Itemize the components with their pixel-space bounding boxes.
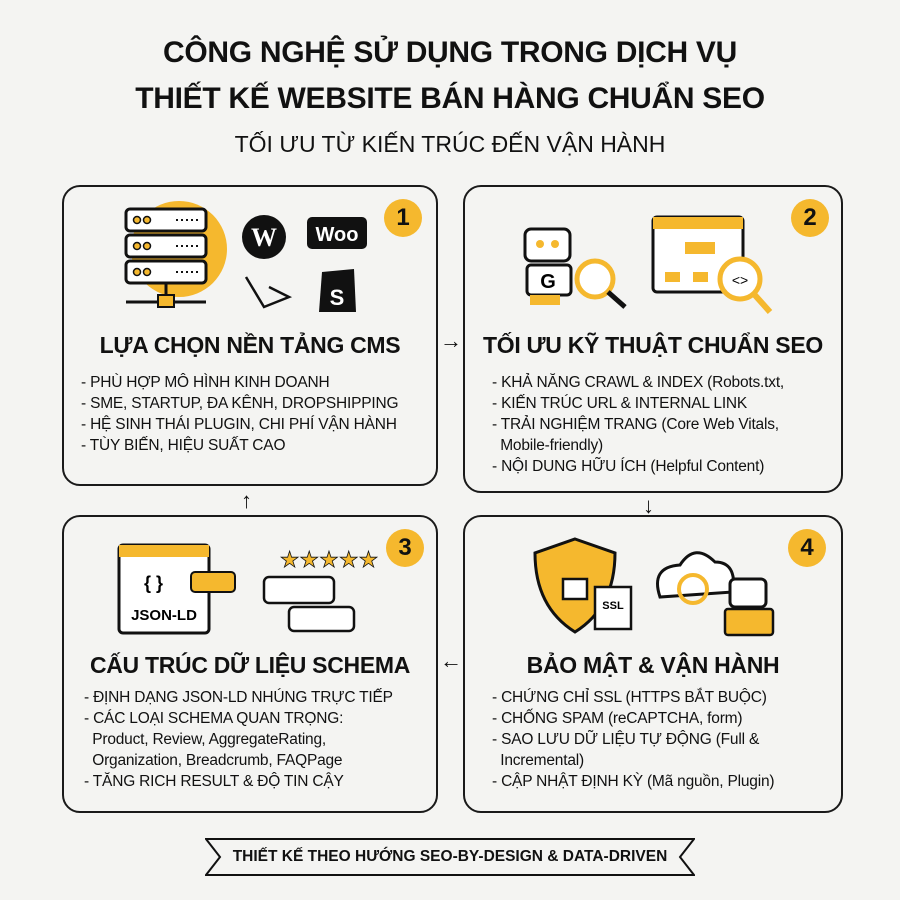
- panel 1: CMS: [62, 185, 438, 486]
- list: - NỘI DUNG HỮU ÍCH (Helpful Content): [492, 458, 764, 475]
- list: - TRẢI NGHIỆM TRANG (Core Web Vitals,: [492, 416, 779, 433]
- list: - KHẢ NĂNG CRAWL & INDEX (Robots.txt,: [492, 374, 784, 391]
- list: [84, 688, 393, 790]
- icons: server and CMS logos: [124, 201, 367, 312]
- list: [492, 373, 784, 475]
- arrow 1 to 2: →: [440, 328, 462, 353]
- list: [81, 373, 398, 454]
- list: - TÙY BIẾN, HIỆU SUẤT CAO: [81, 437, 285, 454]
- arrow 3 to 1: ↑: [241, 488, 252, 513]
- icons: robot and sitemap: [524, 216, 772, 314]
- list: - CHỐNG SPAM (reCAPTCHA, form): [492, 710, 742, 727]
- icons: server and CMS logos: S: [330, 285, 344, 310]
- heading: BẢO MẬT & VẬN HÀNH: [527, 652, 779, 678]
- heading: LỰA CHỌN NỀN TẢNG CMS: [100, 332, 400, 358]
- badge 3: [386, 529, 424, 567]
- footer banner: [205, 838, 695, 876]
- list: Product, Review, AggregateRating,: [92, 731, 326, 748]
- list: Mobile-friendly): [500, 437, 603, 454]
- arrow 4 to 3: ←: [440, 648, 462, 673]
- badge 1: 1: [396, 204, 410, 231]
- heading: CẤU TRÚC DỮ LIỆU SCHEMA: [90, 652, 410, 678]
- title: CÔNG NGHỆ SỬ DỤNG TRONG DỊCH VỤ: [163, 36, 737, 69]
- badge 2: [791, 199, 829, 237]
- list: - ĐỊNH DẠNG JSON-LD NHÚNG TRỰC TIẾP: [84, 689, 393, 706]
- panel 3: schema: [62, 515, 438, 813]
- list: - KIẾN TRÚC URL & INTERNAL LINK: [492, 395, 747, 412]
- panel 4: security: [463, 515, 843, 813]
- arrow 2 to 4: ↓: [643, 493, 654, 518]
- icons: shield, cloud, robot: [534, 537, 774, 636]
- list: - HỆ SINH THÁI PLUGIN, CHI PHÍ VẬN HÀNH: [81, 416, 397, 433]
- footer banner: THIẾT KẾ THEO HƯỚNG SEO-BY-DESIGN & DATA-DRIVEN: [233, 848, 667, 865]
- icons: server and CMS logos: W: [251, 223, 277, 252]
- title: [135, 35, 765, 115]
- badge 1: [384, 199, 422, 237]
- icons: server and CMS logos: Woo: [316, 224, 358, 246]
- icons: robot and sitemap: <>: [732, 272, 748, 288]
- list: [492, 688, 774, 790]
- list: Incremental): [500, 752, 584, 769]
- list: - PHÙ HỢP MÔ HÌNH KINH DOANH: [81, 374, 330, 391]
- list: - TĂNG RICH RESULT & ĐỘ TIN CẬY: [84, 773, 344, 790]
- list: Organization, Breadcrumb, FAQPage: [92, 752, 342, 769]
- panel 2: SEO technical: [463, 185, 843, 493]
- icons: robot and sitemap: G: [540, 271, 556, 293]
- list: - CÁC LOẠI SCHEMA QUAN TRỌNG:: [84, 710, 343, 727]
- icons: JSON-LD and reviews: { }: [144, 573, 163, 593]
- badge 4: 4: [800, 534, 814, 561]
- icons: JSON-LD and reviews: [118, 544, 378, 634]
- list: - CẬP NHẬT ĐỊNH KỲ (Mã nguồn, Plugin): [492, 773, 774, 790]
- list: - SME, STARTUP, ĐA KÊNH, DROPSHIPPING: [81, 395, 398, 412]
- badge 4: [788, 529, 826, 567]
- heading: TỐI ƯU KỸ THUẬT CHUẨN SEO: [483, 332, 823, 358]
- icons: JSON-LD and reviews: JSON-LD: [131, 607, 197, 624]
- list: - SAO LƯU DỮ LIỆU TỰ ĐỘNG (Full &: [492, 731, 759, 748]
- badge 3: 3: [398, 534, 412, 561]
- icons: shield, cloud, robot: SSL: [602, 600, 624, 612]
- subtitle: TỐI ƯU TỪ KIẾN TRÚC ĐẾN VẬN HÀNH: [235, 131, 665, 157]
- badge 2: 2: [803, 204, 817, 231]
- list: - CHỨNG CHỈ SSL (HTTPS BẮT BUỘC): [492, 689, 767, 706]
- icons: JSON-LD and reviews: ★★★★★: [280, 547, 378, 572]
- title: THIẾT KẾ WEBSITE BÁN HÀNG CHUẨN SEO: [135, 82, 765, 115]
